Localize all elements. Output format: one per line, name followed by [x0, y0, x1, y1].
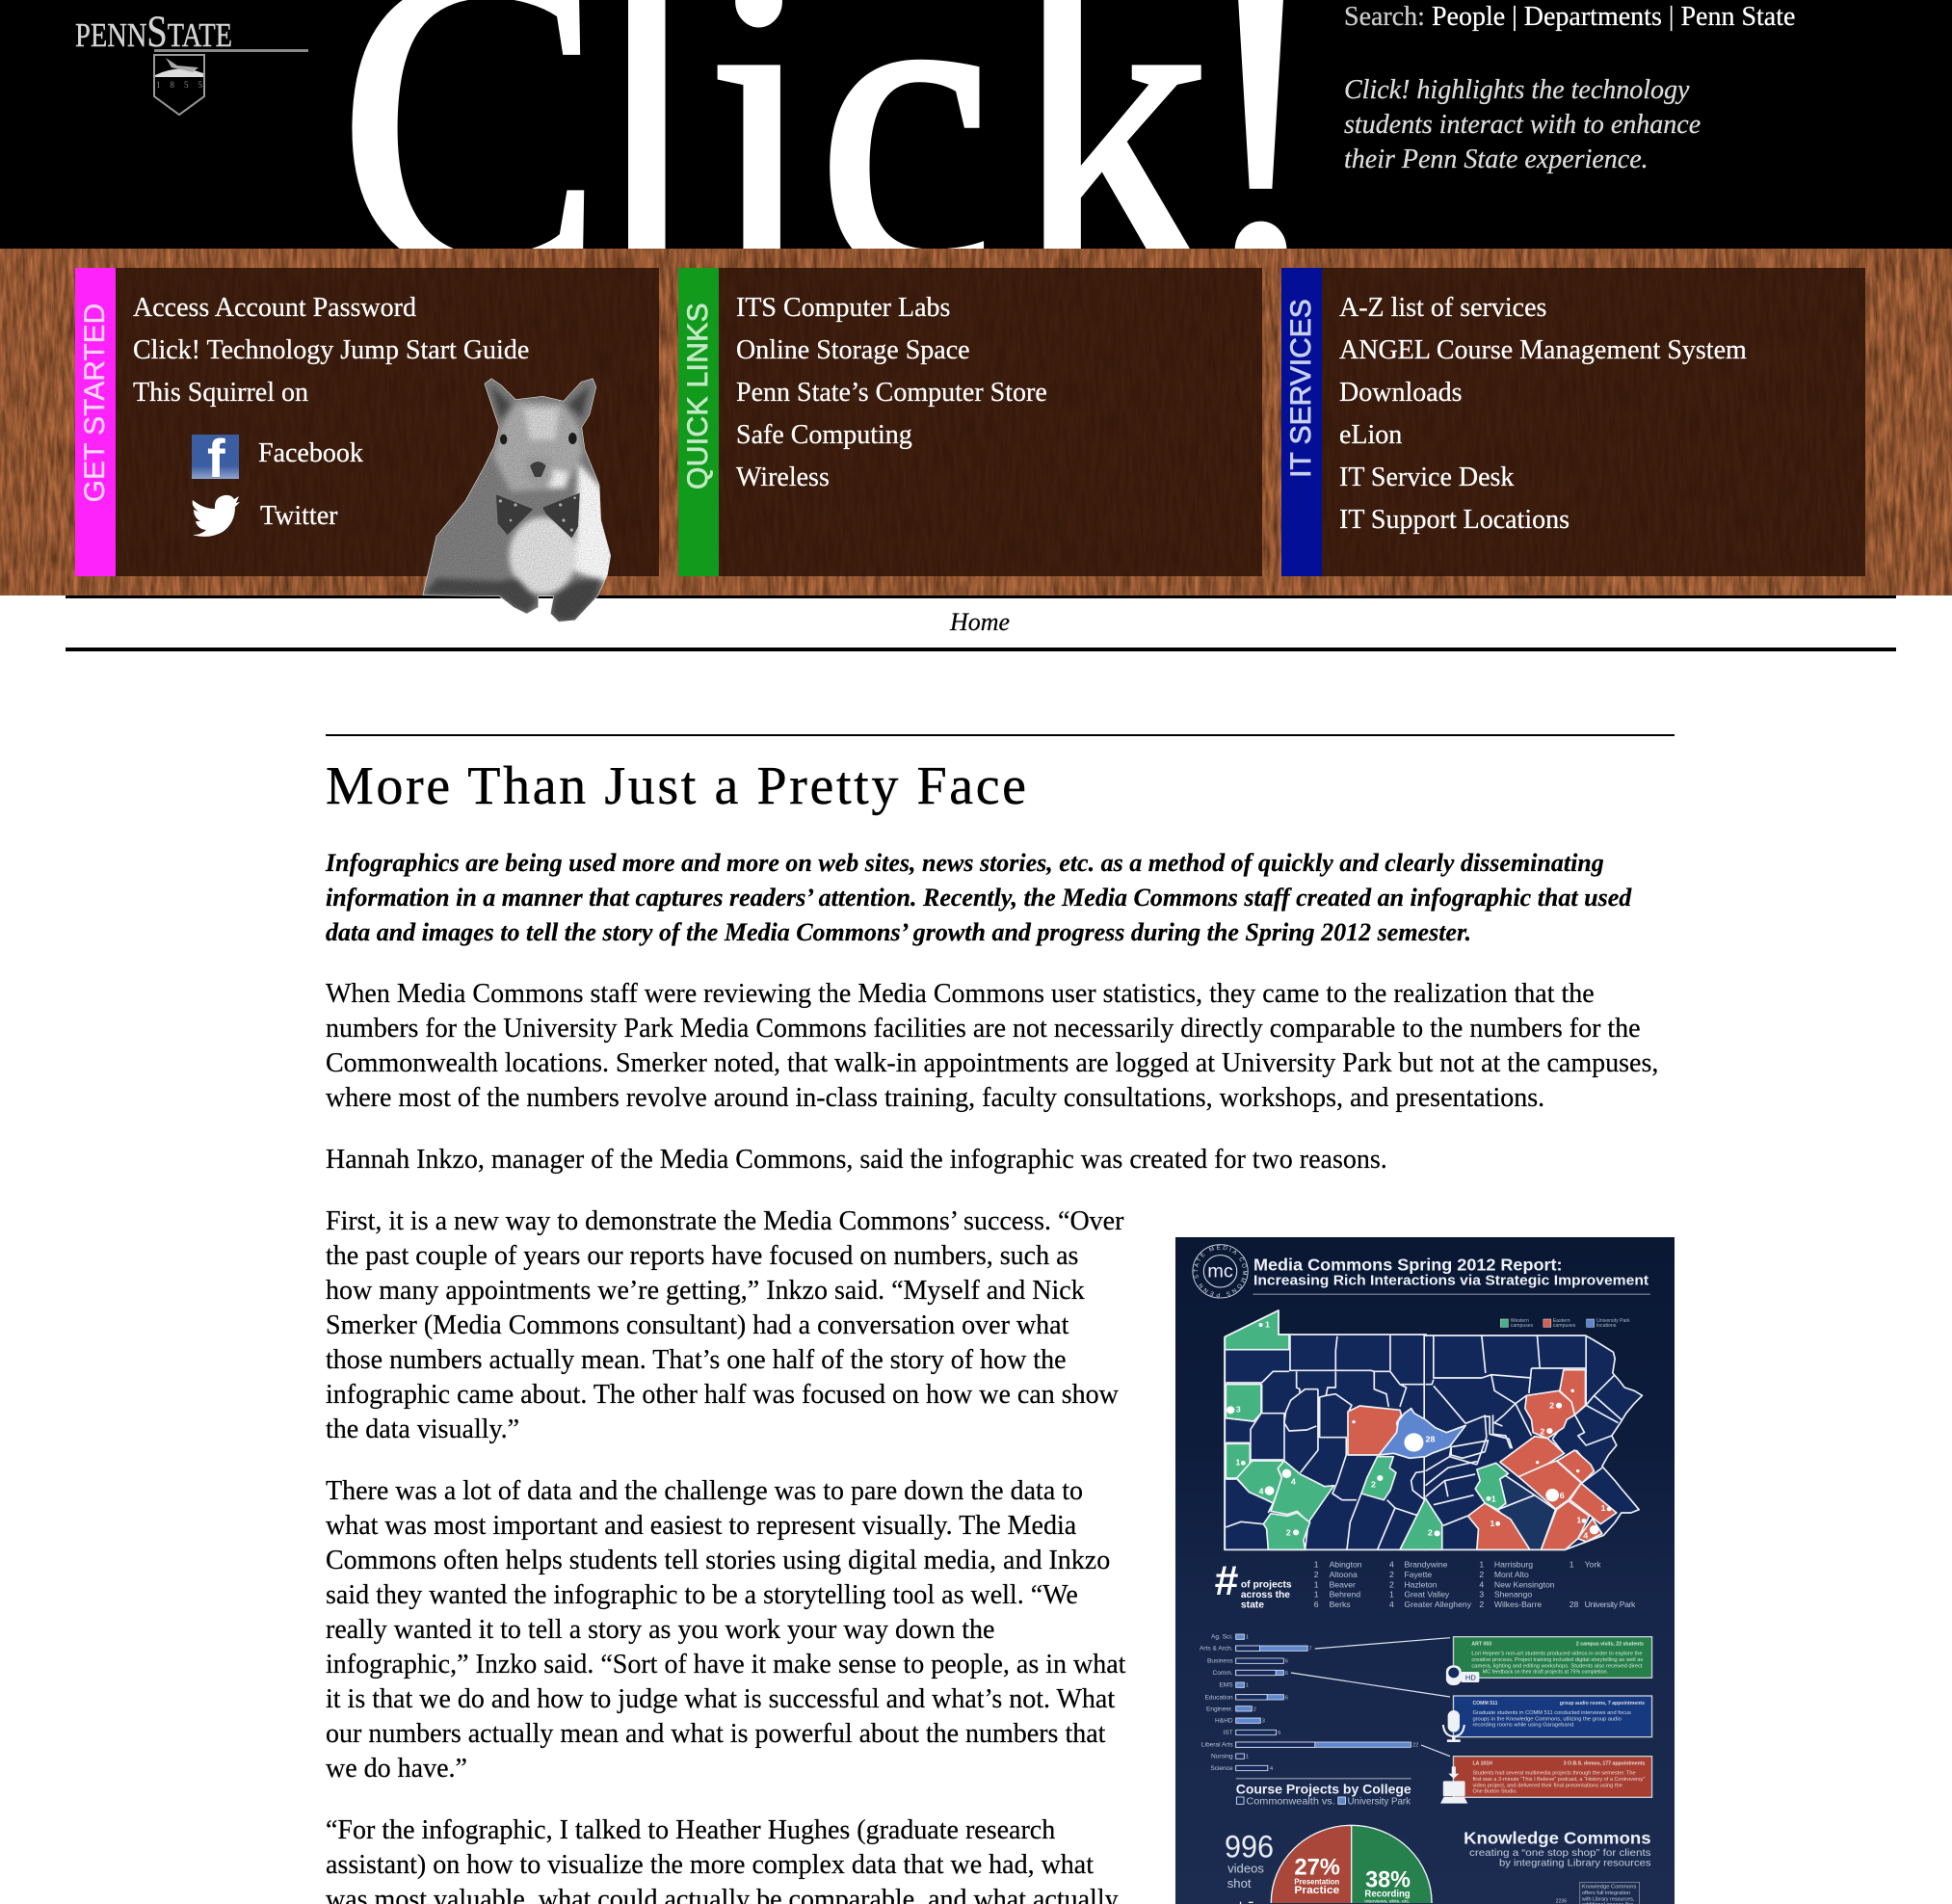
infographic logo badge: PENN STATE MEDIA COMMONS — [1193, 1245, 1247, 1297]
body paragraph: first reason: the past couple of years our reports have focused on numbers, such as — [326, 1241, 1078, 1271]
project count list: 1 — [1314, 1590, 1319, 1600]
link: this squirrel on: This Squirrel on — [133, 378, 308, 408]
link list: quick links: Penn State’s Computer Store — [736, 378, 1047, 408]
nav bar with home link — [66, 595, 1896, 651]
link: twitter: Twitter — [260, 501, 337, 531]
bar chart: course projects by college: Nursing — [1211, 1754, 1233, 1760]
body paragraph: heather hughes: assistant) on how to visualize the more complex data that we had, what — [326, 1850, 1094, 1879]
bar chart: course projects by college: Engineer. — [1206, 1706, 1233, 1712]
pennsylvania county map — [1225, 1310, 1642, 1549]
icon: one button studio — [1440, 1766, 1467, 1804]
callout: art 003: Lori Hepner’s non-art students produced videos in order to explore the — [1471, 1652, 1643, 1657]
body paragraph: first reason: Smerker (Media Commons consultant) had a conversation over what — [326, 1310, 1068, 1340]
body paragraph: paring down data: it is that we do and how to judge what is successful and what’s not. What — [326, 1684, 1115, 1714]
course projects heading: University Park — [1348, 1796, 1411, 1807]
map legend: Western — [1511, 1318, 1529, 1324]
pie chart: appointment types — [1271, 1825, 1432, 1903]
project count list: University Park — [1585, 1600, 1636, 1609]
project count list: New Kensington — [1494, 1579, 1555, 1589]
project count list: 1 — [1570, 1560, 1574, 1570]
map legend: University Park — [1596, 1318, 1630, 1324]
bar chart: course projects by college: 22 — [1412, 1743, 1418, 1749]
panel: get started — [75, 268, 659, 576]
projects across the state heading: of projects — [1241, 1580, 1292, 1591]
body paragraph: first reason: how many appointments we’re getting,” Inkzo said. “Myself and Nick — [326, 1276, 1085, 1306]
bar chart: course projects by college: 1 — [1246, 1635, 1249, 1641]
projects across the state heading: across the — [1241, 1590, 1290, 1600]
bar chart: course projects by college: Liberal Arts — [1201, 1742, 1233, 1749]
wood band background — [0, 249, 1952, 595]
bar chart: course projects by college: Business — [1207, 1658, 1233, 1665]
project count list: 2 — [1479, 1570, 1484, 1579]
project count list: 2 — [1479, 1600, 1484, 1609]
link: jump start guide: Click! Technology Jump Start Guide — [133, 335, 529, 365]
project count list: Hazleton — [1404, 1579, 1438, 1589]
body paragraph: paring down data: our numbers actually mean and what is powerful about the numbers that — [326, 1719, 1105, 1749]
project count list: Beaver — [1330, 1579, 1356, 1589]
knowledge commons heading — [1464, 1828, 1651, 1868]
body paragraph: paring down data: what was most important and easiest to represent visually. The Media — [326, 1511, 1076, 1541]
project count list: 2 — [1389, 1570, 1394, 1579]
tab: it services: IT SERVICES — [1285, 299, 1317, 478]
link list: quick links: Wireless — [736, 463, 830, 492]
bar chart: course projects by college: Arts & Arch. — [1200, 1646, 1233, 1653]
project count list: Berks — [1330, 1600, 1351, 1609]
body paragraph: statistics: When Media Commons staff were reviewing the Media Commons user statistics, they came to the realization that the — [326, 979, 1595, 1009]
tab: get started: GET STARTED — [79, 304, 111, 502]
map center counties — [1400, 1498, 1442, 1549]
knowledge commons note — [1556, 1882, 1639, 1904]
callout: la 101h — [1453, 1757, 1652, 1797]
project count list: 1 — [1389, 1590, 1394, 1600]
link list: quick links: Online Storage Space — [736, 335, 970, 365]
bar chart: course projects by college: EMS — [1219, 1682, 1233, 1689]
bar chart: course projects by college: Ag. Sci. — [1211, 1634, 1233, 1641]
map legend: locations — [1596, 1323, 1617, 1329]
body paragraph: first reason: infographic came about. The other half was focused on how we can show — [326, 1380, 1119, 1410]
project count list — [1314, 1560, 1636, 1609]
callout: art 003: MC feedback on their draft projects at 75% completion. — [1483, 1670, 1608, 1676]
tab: get started — [75, 268, 116, 576]
nav bar with home link: Home — [950, 608, 1010, 636]
project count list: Behrend — [1330, 1590, 1360, 1600]
tab: it services — [1281, 268, 1322, 576]
squirrel mascot — [422, 378, 611, 622]
map dots and counts: 28 — [1426, 1435, 1436, 1444]
callout: la 101h: 3 O.B.S. demos, 177 appointments — [1564, 1761, 1646, 1767]
callout: la 101h: One Button Studio. — [1472, 1789, 1517, 1795]
body paragraph: statistics — [326, 979, 1658, 1113]
body paragraph: statistics: numbers for the University Park Media Commons facilities are not necessarily directly comparable to the numbers for the — [326, 1014, 1641, 1044]
bar chart: course projects by college: 3 — [1262, 1719, 1265, 1725]
infographic title: Media Commons Spring 2012 Report: — [1253, 1255, 1563, 1274]
project count list: Greater Allegheny — [1404, 1600, 1472, 1609]
tagline: Click! highlights the technology — [1344, 75, 1689, 105]
map dots and counts: 2 — [1540, 1427, 1545, 1437]
body paragraph: two reasons: Hannah Inkzo, manager of the Media Commons, said the infographic was created for two reasons. — [326, 1145, 1387, 1175]
knowledge commons note: Knowledge Commons — [1582, 1885, 1636, 1891]
project count list: 4 — [1479, 1579, 1484, 1589]
bar chart: course projects by college: 6 — [1285, 1695, 1288, 1701]
icon: hd camera — [1446, 1665, 1479, 1685]
bar chart: course projects by college: 4 — [1270, 1766, 1274, 1772]
callout: la 101h: Students had several multimedia projects through the semester. The — [1472, 1771, 1636, 1777]
tagline: students interact with to enhance — [1344, 110, 1701, 140]
search links: Search: People | Departments | Penn State — [1344, 2, 1795, 32]
project count list: Brandywine — [1404, 1560, 1448, 1570]
map dots and counts: 2 — [1286, 1527, 1291, 1537]
map dots and counts: 1 — [1491, 1494, 1496, 1503]
bar chart: course projects by college: Education — [1205, 1694, 1233, 1701]
map dots and counts — [1227, 1320, 1612, 1540]
videos shot stat — [1225, 1830, 1274, 1904]
intro paragraph: Infographics are being used more and more on web sites, news stories, etc. as a method of quickly and clearly disseminating — [326, 849, 1604, 877]
body paragraph: paring down data: we do have.” — [326, 1754, 467, 1784]
videos shot stat: shot — [1227, 1876, 1252, 1891]
callout: la 101h: first was a 3-minute “This I Believe” podcast, a “History of a Controversy” — [1472, 1777, 1646, 1783]
knowledge commons heading: by integrating Library resources — [1499, 1857, 1651, 1868]
map dots and counts: 1 — [1490, 1519, 1494, 1528]
project count list: 4 — [1389, 1560, 1394, 1570]
bar chart: course projects by college: 1 — [1246, 1683, 1249, 1689]
bar chart: course projects by college: H&HD — [1215, 1718, 1233, 1725]
link: facebook: Facebook — [258, 438, 363, 468]
project count list: Mont Alto — [1494, 1570, 1529, 1579]
bar chart: course projects by college: 6 — [1285, 1671, 1288, 1677]
callout: art 003: creative process. Project training included digital storytelling as well as — [1471, 1657, 1644, 1663]
callout: art 003: 2 campus visits, 22 students — [1576, 1642, 1644, 1648]
project count list: Wilkes-Barre — [1494, 1600, 1542, 1609]
map dots and counts: 3 — [1236, 1405, 1241, 1415]
panel: quick links — [678, 268, 1262, 576]
body paragraph: first reason — [326, 1206, 1123, 1444]
body paragraph: heather hughes: “For the infographic, I talked to Heather Hughes (graduate research — [326, 1815, 1055, 1844]
infographic title — [1253, 1255, 1650, 1295]
videos shot stat: 996 — [1225, 1830, 1274, 1864]
bow tie — [496, 493, 580, 538]
callout: art 003: camera, lighting and editing workshops. Students also received direct — [1471, 1663, 1643, 1669]
project count list: 1 — [1314, 1560, 1319, 1570]
body paragraph: paring down data: There was a lot of data and the challenge was to pare down the data to — [326, 1476, 1083, 1506]
icon: facebook — [192, 435, 239, 479]
intro paragraph: information in a manner that captures readers’ attention. Recently, the Media Commons staff created an infographic that used — [326, 884, 1631, 912]
tagline — [1344, 75, 1701, 174]
callout: comm 511: groups in the Knowledge Commons, utilizing the group audio — [1472, 1716, 1622, 1722]
map west half — [1225, 1310, 1427, 1549]
project count list: 1 — [1314, 1579, 1319, 1589]
pie chart: appointment types: Presentation — [1294, 1878, 1339, 1887]
bar chart: course projects by college: 1 — [1246, 1755, 1249, 1760]
projects across the state heading: state — [1241, 1600, 1264, 1610]
link list: quick links: ITS Computer Labs — [736, 293, 950, 323]
project count list: Abington — [1330, 1560, 1362, 1570]
bar chart: course projects by college — [1200, 1634, 1418, 1772]
Penn State logo: 1 8 5 5 — [156, 80, 202, 90]
map dots and counts: 2 — [1428, 1528, 1433, 1538]
knowledge commons note: with Library resources, — [1581, 1896, 1635, 1902]
link list: it services: IT Support Locations — [1339, 505, 1570, 535]
map dots and counts: 1 — [1600, 1503, 1606, 1513]
link list: it services — [1339, 293, 1747, 535]
bar chart: course projects by college: Comm. — [1213, 1670, 1233, 1677]
callout: art 003 — [1453, 1637, 1652, 1678]
callout: comm 511: Graduate students in COMM 511 conducted interviews and focus — [1472, 1710, 1631, 1716]
map legend — [1500, 1318, 1630, 1329]
knowledge commons heading: Knowledge Commons — [1464, 1828, 1651, 1847]
project count list: 3 — [1479, 1590, 1484, 1600]
bar chart: course projects by college: 2 — [1253, 1706, 1256, 1712]
header black band — [0, 0, 1952, 249]
map dots and counts: 1 — [1235, 1458, 1240, 1468]
body paragraph: paring down data: said they wanted the infographic to be a storytelling tool as well. “We — [326, 1580, 1078, 1610]
body paragraph: paring down data: Commons often helps students tell stories using digital media, and Inkzo — [326, 1546, 1110, 1575]
pie chart: appointment types: 38% — [1365, 1867, 1411, 1892]
map legend: campuses — [1511, 1323, 1534, 1329]
callout: comm 511 — [1453, 1696, 1652, 1737]
bar chart: course projects by college: 6 — [1285, 1659, 1288, 1665]
callout: la 101h: video project, and delivered their final presentations using the — [1472, 1783, 1622, 1788]
infographic: media commons report — [1175, 1237, 1675, 1904]
icon: hd camera: HD — [1465, 1673, 1476, 1681]
project count list: Great Valley — [1404, 1590, 1450, 1600]
projects across the state heading: # — [1215, 1558, 1238, 1604]
link: access account password: Access Account Password — [133, 293, 416, 323]
bar chart: course projects by college: Science — [1210, 1765, 1233, 1772]
bar chart: course projects by college: 5 — [1278, 1731, 1280, 1736]
map legend: campuses — [1553, 1323, 1576, 1329]
Penn State logo: PENNSTATE — [75, 7, 232, 57]
project count list: Altoona — [1330, 1570, 1358, 1579]
body paragraph: heather hughes — [326, 1815, 1119, 1904]
divider above article — [326, 734, 1675, 736]
pie chart: appointment types: Practice — [1294, 1885, 1340, 1896]
tagline: their Penn State experience. — [1344, 145, 1649, 174]
tab: quick links — [678, 268, 719, 576]
map legend: Eastern — [1553, 1318, 1570, 1324]
knowledge commons note: offers full integration — [1582, 1891, 1630, 1896]
body paragraph: paring down data: really wanted it to tell a story as you work your way down the — [326, 1615, 994, 1645]
link list: it services: ANGEL Course Management System — [1339, 335, 1747, 365]
body paragraph: paring down data: infographic,” Inzko said. “Sort of have it make sense to people, as in what — [326, 1650, 1125, 1679]
map east half — [1424, 1335, 1642, 1549]
icon: microphone — [1443, 1710, 1464, 1742]
link list: it services: eLion — [1339, 420, 1402, 450]
course projects heading: Course Projects by College — [1236, 1783, 1411, 1798]
infographic logo badge: mc — [1207, 1261, 1233, 1282]
map dots and counts: 2 — [1371, 1480, 1376, 1490]
link list: quick links: Safe Computing — [736, 420, 912, 450]
project count list: Fayette — [1404, 1570, 1432, 1579]
map dots and counts: 4 — [1259, 1486, 1264, 1495]
body paragraph: first reason: First, it is a new way to demonstrate the Media Commons’ success. “Over — [326, 1206, 1123, 1236]
project count list: 28 — [1570, 1600, 1579, 1609]
knowledge commons heading: creating a “one stop shop” for clients — [1469, 1847, 1651, 1859]
intro paragraph — [326, 849, 1632, 946]
icon: twitter bird — [193, 495, 240, 537]
project count list: York — [1585, 1560, 1601, 1570]
callout: comm 511: recording rooms while using Garageband. — [1472, 1723, 1575, 1729]
link list: it services: IT Service Desk — [1339, 463, 1514, 492]
body paragraph: statistics: where most of the numbers revolve around in-class training, faculty consultations, workshops, and presentations. — [326, 1083, 1544, 1113]
project count list: 4 — [1389, 1600, 1394, 1609]
map dots and counts: 6 — [1560, 1491, 1565, 1500]
project count list: Shenango — [1494, 1590, 1532, 1600]
body paragraph: first reason: those numbers actually mean. That’s one half of the story of how the — [326, 1345, 1067, 1375]
panel: it services — [1281, 268, 1865, 576]
bar chart: course projects by college: 7 — [1309, 1647, 1312, 1653]
link list: it services: Downloads — [1339, 378, 1463, 408]
project count list: 2 — [1314, 1570, 1319, 1579]
callout: art 003: ART 003 — [1471, 1642, 1491, 1648]
videos shot stat: videos — [1227, 1862, 1264, 1875]
bar chart: course projects by college: IST — [1223, 1730, 1233, 1736]
course projects heading — [1236, 1778, 1411, 1807]
callout: la 101h: LA 101H — [1472, 1761, 1492, 1767]
Penn State logo — [75, 7, 308, 116]
project count list: 1 — [1479, 1560, 1484, 1570]
pie chart: appointment types: Recording — [1364, 1889, 1411, 1899]
projects across the state heading — [1215, 1558, 1292, 1610]
map dots and counts: 4 — [1583, 1530, 1588, 1540]
project count list: 6 — [1314, 1600, 1319, 1609]
callout: comm 511: group audio rooms, 7 appointments — [1560, 1701, 1645, 1706]
map dots and counts: 1 — [1576, 1516, 1581, 1525]
connector lines — [1291, 1638, 1450, 1757]
tab: quick links: QUICK LINKS — [682, 303, 714, 489]
body paragraph: statistics: Commonwealth locations. Smerker noted, that walk-in appointments are logged at University Park but not at the campuses, — [326, 1048, 1658, 1078]
pie chart: appointment types: interviews, skits, etc. — [1364, 1898, 1410, 1903]
article title: More Than Just a Pretty Face — [326, 756, 1029, 816]
pie chart: appointment types: 27% — [1294, 1855, 1340, 1881]
map dots and counts: 2 — [1549, 1400, 1554, 1410]
project count list: 2 — [1389, 1579, 1394, 1589]
map dots and counts: 1 — [1265, 1320, 1270, 1330]
body paragraph: first reason: the data visually.” — [326, 1415, 519, 1444]
callout: comm 511: COMM 511 — [1472, 1701, 1498, 1706]
link list: quick links — [736, 293, 1047, 492]
project count list: Harrisburg — [1494, 1560, 1533, 1570]
map dots and counts: 4 — [1291, 1477, 1296, 1487]
course projects heading: Commonwealth vs. — [1246, 1796, 1335, 1807]
infographic title: Increasing Rich Interactions via Strategic Improvement — [1253, 1273, 1649, 1288]
body paragraph: paring down data — [326, 1476, 1125, 1784]
intro paragraph: data and images to tell the story of the Media Commons’ growth and progress during the Spring 2012 semester. — [326, 918, 1471, 946]
link list: it services: A-Z list of services — [1339, 293, 1546, 323]
